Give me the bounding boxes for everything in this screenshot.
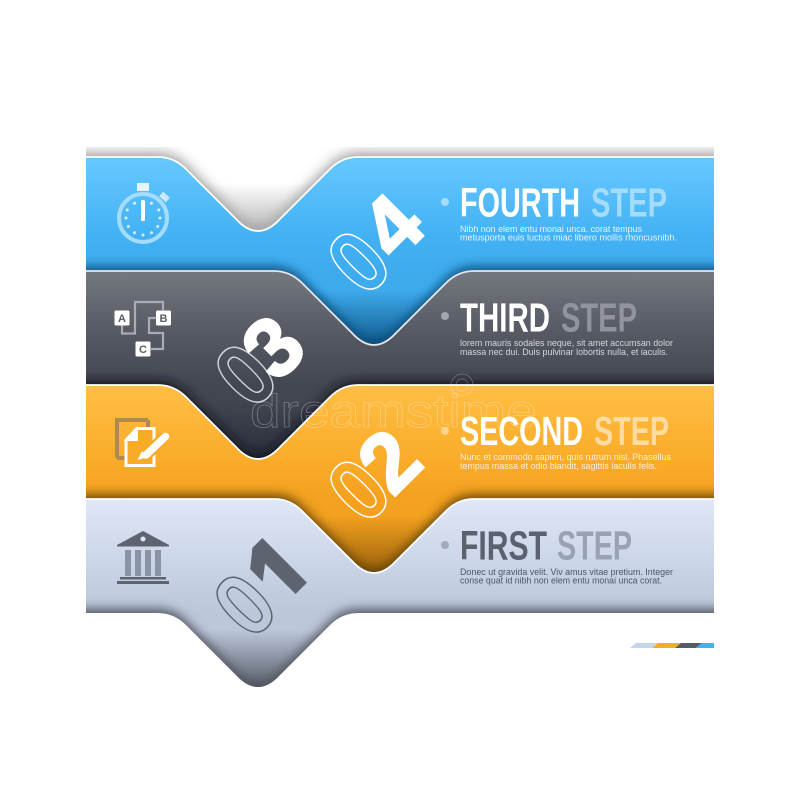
text block: conse quat id nibh non elem entu monai unca corat.: [460, 576, 662, 586]
heading: third step: THIRD: [460, 294, 550, 340]
text block: metusporta euis luctus miac libero mollis rhoncusnibh.: [460, 232, 677, 242]
icon: ABC flow: [114, 302, 171, 356]
text block: [460, 338, 673, 357]
text block: Nibh non elem entu monai unca. corat tempus: [460, 224, 642, 234]
band: blue: [86, 157, 714, 347]
icon: bank building: [117, 531, 169, 584]
icon: stopwatch: [119, 183, 170, 242]
text block: [460, 567, 673, 586]
colour key bar: [630, 643, 714, 648]
bullet: [441, 541, 449, 549]
band: dark grey: [86, 271, 714, 461]
text block: lorem mauris sodales neque, sit amet accumsan dolor: [460, 338, 673, 348]
icon: document and pencil: [117, 420, 166, 466]
heading: first step: [460, 522, 632, 568]
panel: third step: [86, 270, 714, 458]
number 04: 0: [308, 211, 409, 312]
bullet: [441, 198, 449, 206]
text block: massa nec dui. Duis pulvinar lobortis nulla, et iaculis.: [460, 347, 668, 357]
icon: ABC flow: B: [160, 313, 168, 325]
number 02: 2: [339, 411, 439, 511]
heading: second step: STEP: [594, 408, 669, 454]
band: light blue-grey: [86, 499, 714, 687]
number 03: 3: [223, 297, 323, 397]
text block: Donec ut gravida velit. Viv amus vitae pretium. Integer: [460, 567, 673, 577]
number 03: [195, 297, 323, 425]
text block: [460, 452, 671, 471]
watermark: [250, 374, 537, 437]
number 02: 0: [308, 439, 409, 540]
watermark: dreamstime: [250, 385, 537, 437]
number 01: 0: [194, 554, 295, 655]
panel: fourth step: [86, 156, 714, 344]
text block: [460, 224, 677, 242]
text block: Nunc et commodo sapien, quis rutrum nisi. Phasellus: [460, 452, 671, 462]
number 01: 1: [224, 514, 345, 635]
heading: second step: SECOND: [460, 408, 583, 454]
number 03: 0: [195, 324, 296, 425]
number 02: [308, 411, 439, 540]
heading: first step: FIRST: [460, 522, 547, 568]
heading: third step: STEP: [561, 294, 637, 340]
heading: fourth step: FOURTH: [460, 180, 580, 226]
heading: first step: STEP: [557, 522, 632, 568]
panel: second step: [86, 384, 714, 572]
text block: tempus massa et odio blandit, sagittis iaculis felis.: [460, 461, 657, 471]
band: orange: [86, 385, 714, 575]
bullet: [441, 427, 449, 435]
icon: ABC flow: C: [139, 344, 147, 356]
bullet: [441, 312, 449, 320]
number 04: [308, 176, 442, 312]
icon: ABC flow: A: [118, 313, 126, 325]
top shadow strip: [86, 147, 714, 230]
panel: first step: [86, 498, 714, 687]
number 01: [216, 538, 307, 633]
heading: fourth step: STEP: [591, 180, 667, 226]
number 04: 4: [342, 176, 442, 276]
